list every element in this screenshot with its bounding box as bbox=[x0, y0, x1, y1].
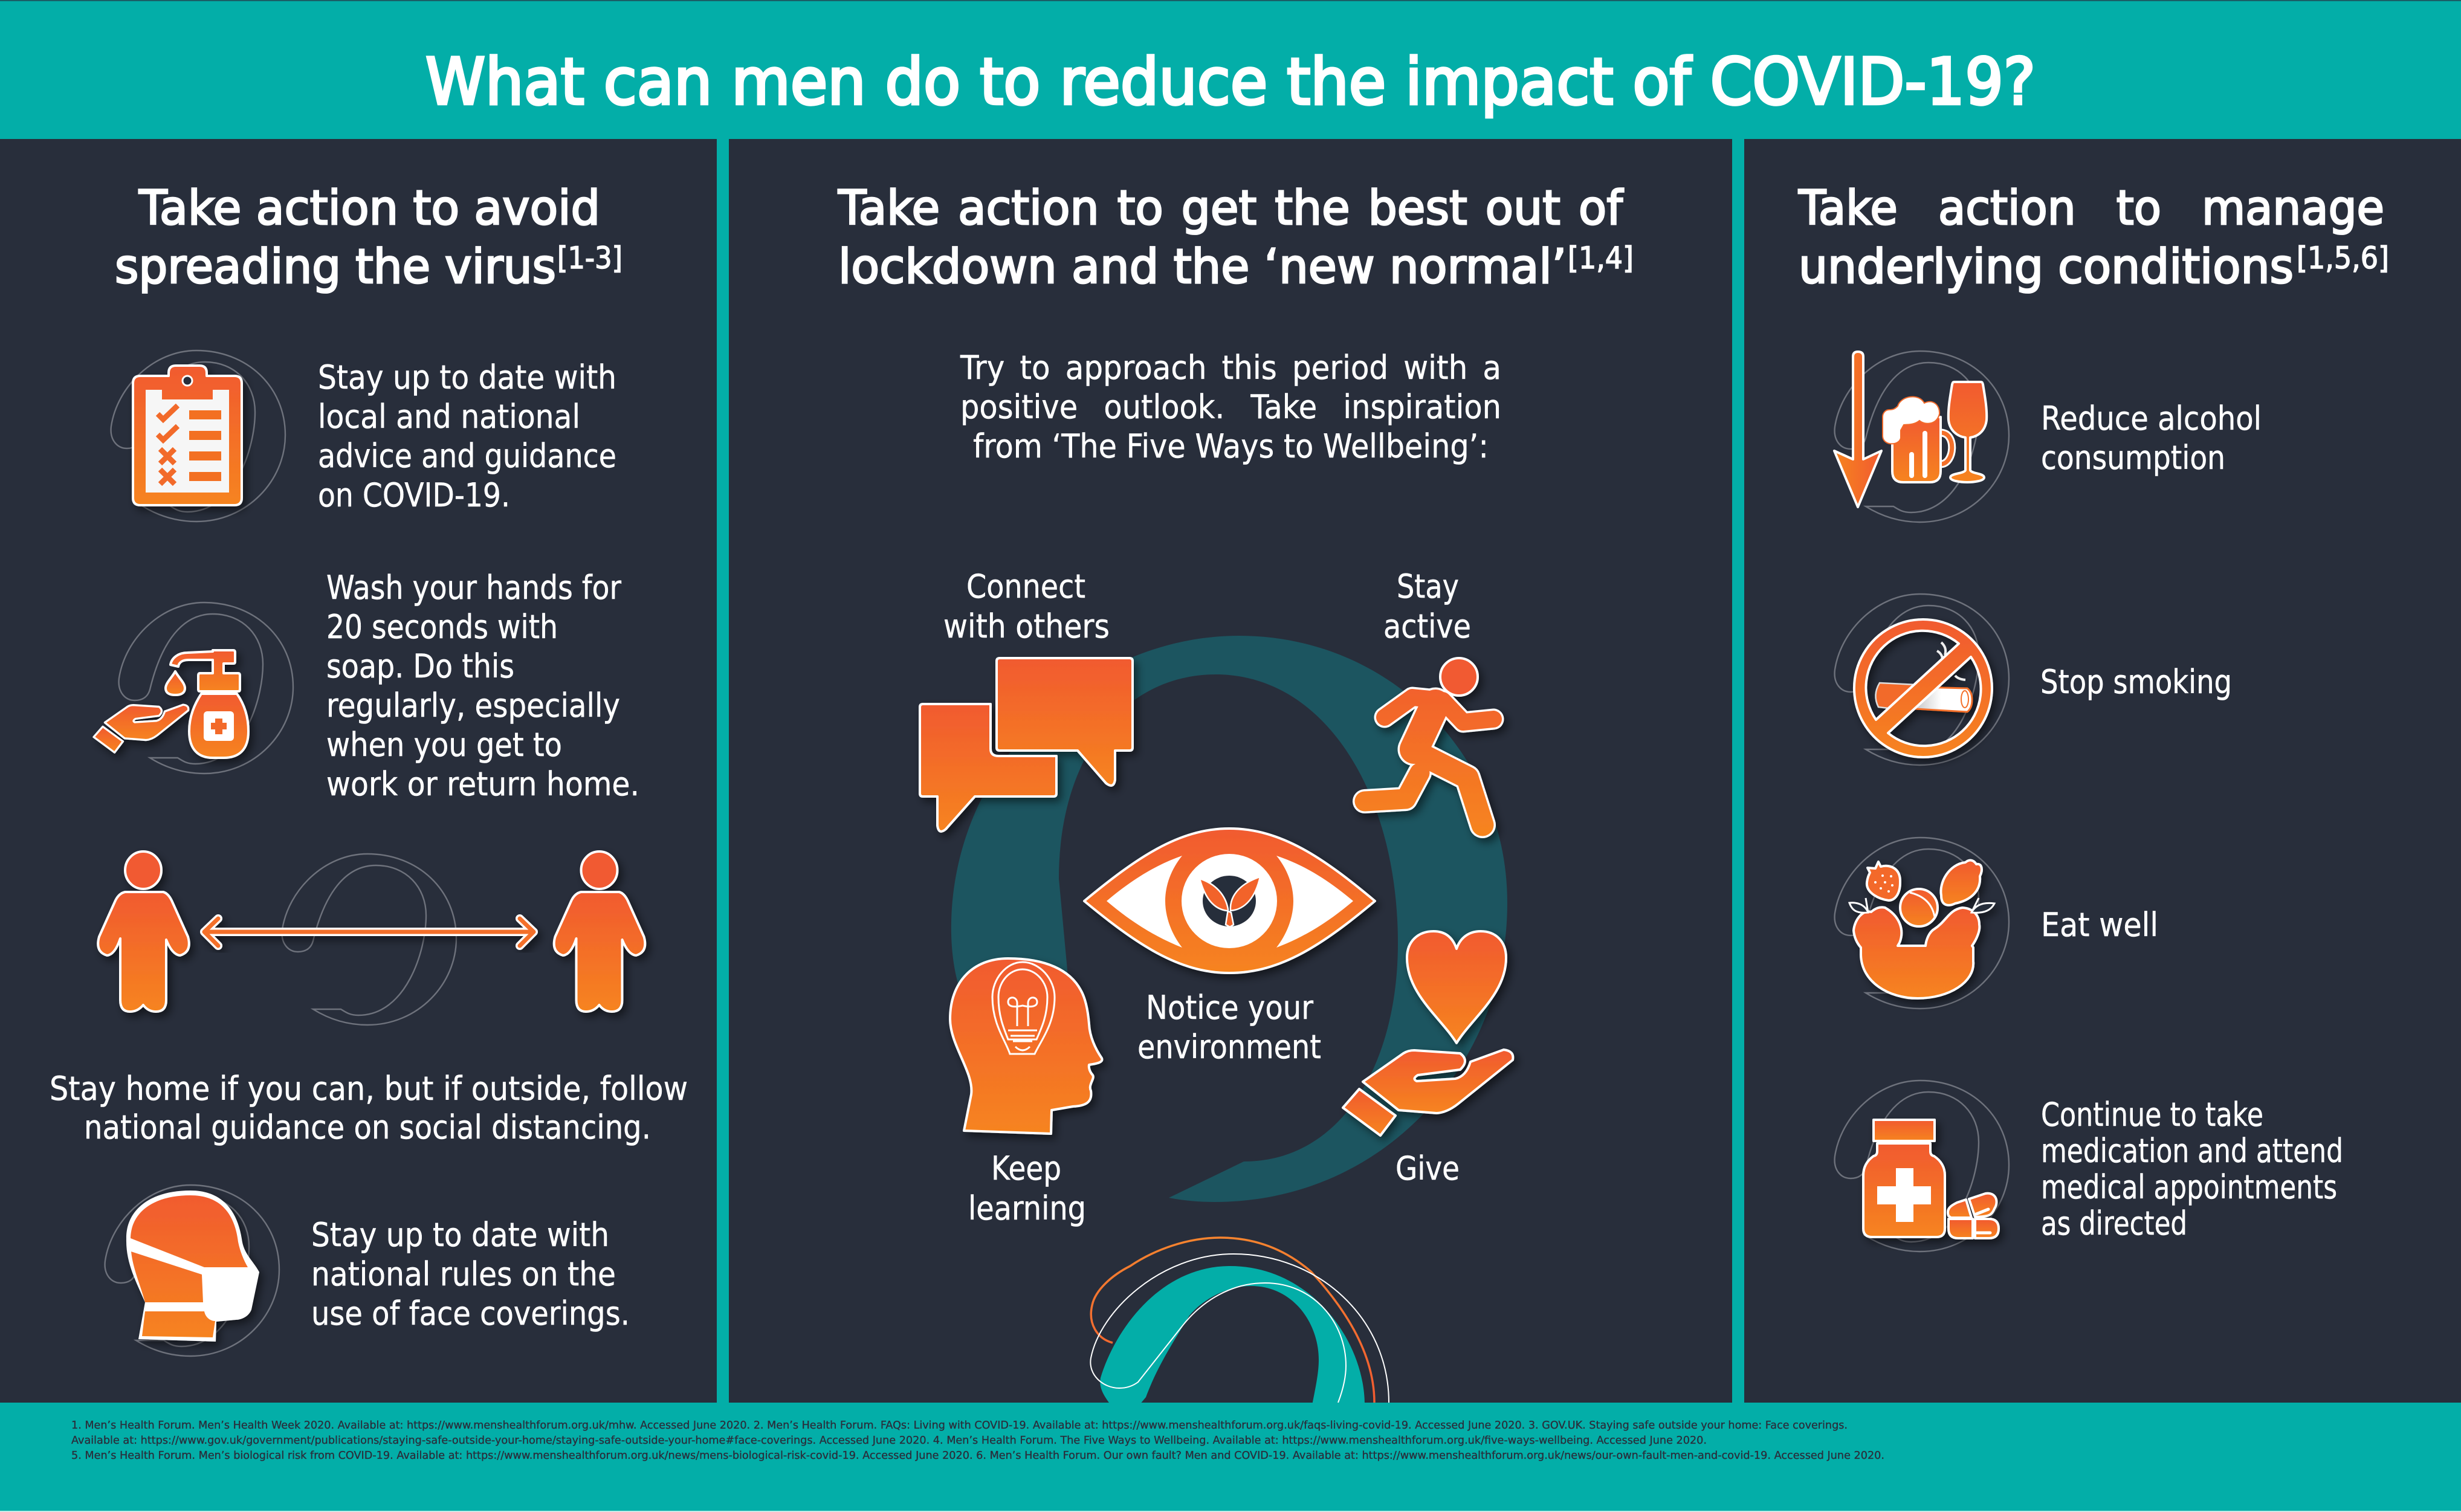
text: continue medication bbox=[2041, 1096, 2343, 1242]
title banner bbox=[0, 0, 2461, 139]
chart background: large teal swirl bbox=[951, 636, 1507, 1202]
text: stay up to date with advice: Stay up to date with bbox=[318, 358, 616, 396]
label: notice your environment: environment bbox=[1137, 1028, 1321, 1066]
icon: eye with leaves bbox=[1084, 829, 1375, 973]
heading: centre column bbox=[838, 181, 1634, 294]
heading: left column bbox=[115, 181, 623, 294]
footer: references: 1. Men’s Health Forum. Men’s Health Week 2020. Available at: https://www.menshealthforum.org.uk/mhw. Accessed June 2020. 2. Men’s Health Forum. FAQs: Living with COVID-19. Available at: https://www.menshealthforum.org.uk/faqs-living-covid-19. Accessed June 2020. 3. GOV.UK. Staying safe outside your home: Face coverings. bbox=[71, 1419, 1848, 1432]
lemon bbox=[1941, 861, 1982, 905]
text: face coverings: national rules on the bbox=[311, 1255, 616, 1293]
logo: teal swirl at bottom bbox=[1090, 1238, 1389, 1405]
icon: speech bubbles bbox=[920, 658, 1133, 832]
label: give: Give bbox=[1395, 1149, 1460, 1187]
text: stay home: national guidance on social distancing. bbox=[84, 1108, 651, 1146]
label: stay active: active bbox=[1383, 607, 1471, 645]
text: stay up to date with advice: advice and guidance bbox=[318, 437, 616, 475]
text: continue medication: Continue to take bbox=[2041, 1096, 2263, 1134]
heading: left column: [1-3] bbox=[557, 241, 623, 276]
label: notice your environment bbox=[1137, 989, 1321, 1066]
arrow: down bbox=[1834, 352, 1881, 507]
label: connect with others: Connect bbox=[966, 567, 1085, 606]
text: wash your hands: 20 seconds with bbox=[326, 608, 558, 646]
panel: avoid spreading the virus bbox=[50, 181, 688, 1356]
icon: reduce alcohol bbox=[1834, 351, 2009, 522]
text: positive outlook intro: positive outlook. Take inspiration bbox=[960, 388, 1501, 426]
text: wash your hands: soap. Do this bbox=[326, 647, 514, 685]
wine glass bbox=[1948, 382, 1987, 482]
text: reduce alcohol: Reduce alcohol bbox=[2041, 399, 2262, 438]
text: positive outlook intro: from ‘The Five Ways to Wellbeing’: bbox=[973, 427, 1489, 465]
label: keep learning: learning bbox=[968, 1189, 1086, 1227]
icon: hand washing soap bbox=[94, 603, 293, 774]
icon: heart above open hand bbox=[1343, 931, 1513, 1136]
text: face coverings: use of face coverings. bbox=[311, 1294, 630, 1333]
heading: right column bbox=[1798, 181, 2389, 294]
text: wash your hands: regularly, especially bbox=[326, 687, 620, 725]
footer: references bbox=[0, 1403, 2461, 1512]
strawberry bbox=[1867, 862, 1900, 900]
text: stay up to date with advice: on COVID-19. bbox=[318, 476, 510, 514]
label: stay active bbox=[1383, 567, 1471, 645]
text: stay up to date with advice: local and national bbox=[318, 398, 580, 436]
footer: references: Available at: https://www.gov.uk/government/publications/staying-safe-outside-your-home/staying-safe-outside-your-home#face-coverings. Accessed June 2020. 4. Men’s Health Forum. The Five Ways to Wellbeing. Available at: https://www.menshealthforum.org.uk/five-ways-wellbeing. Accessed June 2020. bbox=[71, 1434, 1707, 1447]
icon: fruit bbox=[1835, 838, 2009, 1009]
heading: left column: spreading the virus bbox=[115, 240, 556, 294]
label: keep learning bbox=[968, 1149, 1086, 1227]
text: wash your hands bbox=[326, 569, 639, 803]
text: continue medication: medication and attend bbox=[2041, 1132, 2343, 1170]
label: connect with others: with others bbox=[943, 607, 1110, 645]
text: wash your hands: Wash your hands for bbox=[326, 569, 622, 607]
text: face coverings bbox=[311, 1216, 630, 1333]
icon: no smoking bbox=[1835, 594, 2009, 765]
label: notice your environment: Notice your bbox=[1146, 989, 1314, 1027]
text: reduce alcohol: consumption bbox=[2041, 439, 2225, 477]
text: wash your hands: when you get to bbox=[326, 726, 562, 764]
column divider: left bbox=[717, 139, 729, 1403]
icon: social distancing bbox=[98, 851, 645, 1025]
column divider: right bbox=[1732, 139, 1744, 1403]
text: positive outlook intro: Try to approach this period with a bbox=[960, 349, 1501, 387]
heading: right column: underlying conditions bbox=[1799, 240, 2294, 294]
text: stay home bbox=[50, 1070, 688, 1146]
text: stay up to date with advice bbox=[318, 358, 616, 514]
heading: right column: Take action to manage bbox=[1798, 181, 2384, 236]
beer mug bbox=[1883, 396, 1952, 482]
text: stop smoking: Stop smoking bbox=[2040, 663, 2232, 701]
heading: left column: Take action to avoid bbox=[138, 181, 600, 236]
footer: references: 5. Men’s Health Forum. Men’s biological risk from COVID-19. Available at: https://www.menshealthforum.org.uk/news/mens-biological-risk-covid-19. Accessed June 2020. 6. Men’s Health Forum. Our own fault? Men and COVID-19. Available at: https://www.menshealthforum.org.uk/news/our-own-fault-men-and-covid-19. Accessed June 2020. bbox=[71, 1449, 1884, 1462]
title: What can men do to reduce the impact of COVID-19? bbox=[425, 45, 2036, 119]
text: eat well: Eat well bbox=[2041, 906, 2158, 944]
text: wash your hands: work or return home. bbox=[326, 765, 639, 803]
icon: head with face mask bbox=[105, 1185, 279, 1356]
text: continue medication: medical appointments bbox=[2041, 1168, 2337, 1206]
icon: medicine bottle and pills bbox=[1835, 1081, 2009, 1252]
icon: runner bbox=[1365, 658, 1493, 825]
label: connect with others bbox=[943, 567, 1110, 645]
icon: clipboard checklist bbox=[111, 351, 285, 522]
text: continue medication: as directed bbox=[2041, 1204, 2187, 1242]
arrow: two metres apart bbox=[204, 919, 534, 946]
heading: centre column: [1,4] bbox=[1568, 241, 1634, 276]
peach bbox=[1900, 889, 1938, 926]
person right bbox=[554, 851, 645, 1012]
icon: head with lightbulb bbox=[950, 958, 1102, 1134]
heading: centre column: Take action to get the best out of bbox=[838, 181, 1623, 236]
label: keep learning: Keep bbox=[991, 1149, 1061, 1187]
heading: right column: [1,5,6] bbox=[2297, 241, 2389, 276]
heading: centre column: lockdown and the ‘new normal’ bbox=[838, 240, 1567, 294]
soap pump bbox=[170, 650, 240, 691]
text: reduce alcohol bbox=[2041, 399, 2262, 477]
text: stay home: Stay home if you can, but if outside, follow bbox=[50, 1070, 688, 1108]
panel: best out of lockdown bbox=[838, 181, 1634, 1405]
label: stay active: Stay bbox=[1397, 567, 1459, 606]
cigarette bbox=[1895, 687, 1972, 712]
pear leaves bbox=[1849, 898, 1994, 913]
panel: manage underlying conditions bbox=[1798, 181, 2389, 1252]
text: positive outlook intro bbox=[960, 349, 1501, 465]
person left bbox=[98, 851, 189, 1012]
text: face coverings: Stay up to date with bbox=[311, 1216, 609, 1254]
